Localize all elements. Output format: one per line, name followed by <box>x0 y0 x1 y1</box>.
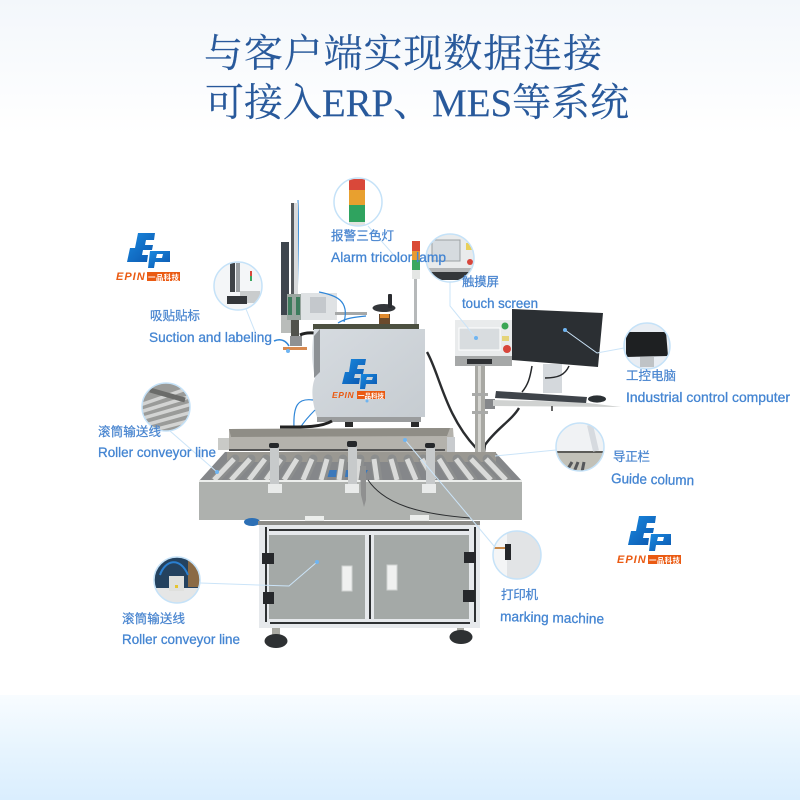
callout: suction and labeling <box>149 262 272 345</box>
callout: touch screen: touch screen <box>462 295 538 311</box>
callout: alarm lamp <box>331 178 446 265</box>
guide brackets <box>268 441 470 522</box>
cables <box>427 352 476 448</box>
leader lines <box>170 226 624 586</box>
bottom gradient band <box>0 695 800 800</box>
motor <box>244 518 260 526</box>
callout: alarm lamp: Alarm tricolor lamp <box>331 249 446 265</box>
labeling mast <box>274 200 307 350</box>
callout: printer: marking machine <box>500 608 605 627</box>
keyboard shelf <box>493 391 621 411</box>
title: 可接入ERP、MES等系统 <box>205 82 629 125</box>
callout: industrial computer: Industrial control computer <box>626 389 790 405</box>
feet <box>264 628 472 648</box>
callout: alarm lamp: 报警三色灯 <box>331 228 394 243</box>
callout: roller conveyor line lower: Roller conveyor line <box>122 631 240 647</box>
machine illustration <box>199 200 621 648</box>
callout: guide column <box>556 423 694 488</box>
logo: lower right: EPIN <box>617 554 647 566</box>
roller conveyor <box>199 452 522 481</box>
handwheel <box>372 294 396 324</box>
touch panel <box>455 320 512 366</box>
callout: touch screen <box>426 234 538 311</box>
monitor <box>512 309 603 393</box>
main printer housing: EPIN <box>332 390 355 400</box>
title <box>204 33 629 125</box>
dark top plate <box>313 324 419 330</box>
pole and arm <box>472 366 495 456</box>
slide rail <box>218 428 455 455</box>
callout: roller conveyor line lower <box>122 557 240 647</box>
callout: touch screen: 触摸屏 <box>462 275 499 289</box>
conveyor front plate <box>199 466 522 520</box>
callout: guide column: 导正栏 <box>613 449 650 464</box>
main printer housing <box>280 329 425 428</box>
callout: printer: 打印机 <box>501 588 538 602</box>
callout: roller conveyor line upper: Roller conveyor line <box>98 444 216 460</box>
callout: industrial computer <box>624 323 790 405</box>
callout: suction and labeling: Suction and labeling <box>149 329 272 345</box>
logo: top left <box>116 233 180 283</box>
main printer housing: 一品科技 <box>358 391 384 400</box>
base cabinet <box>258 521 480 628</box>
title: 与客户端实现数据连接 <box>204 33 603 76</box>
callout: printer <box>493 531 605 627</box>
logo: top left: 一品科技 <box>148 272 180 282</box>
callout: roller conveyor line upper <box>98 383 216 460</box>
logo: top left: EPIN <box>116 271 146 283</box>
callout: suction and labeling: 吸贴贴标 <box>150 309 200 323</box>
callout: industrial computer: 工控电脑 <box>626 369 676 383</box>
callout: guide column: Guide column <box>611 470 694 488</box>
callout: roller conveyor line lower: 滚筒输送线 <box>122 611 185 626</box>
labeling head <box>300 292 367 335</box>
tower lamp <box>412 241 420 326</box>
logo: lower right <box>617 516 681 566</box>
logo: lower right: 一品科技 <box>649 555 680 565</box>
callout: roller conveyor line upper: 滚筒输送线 <box>98 424 161 439</box>
